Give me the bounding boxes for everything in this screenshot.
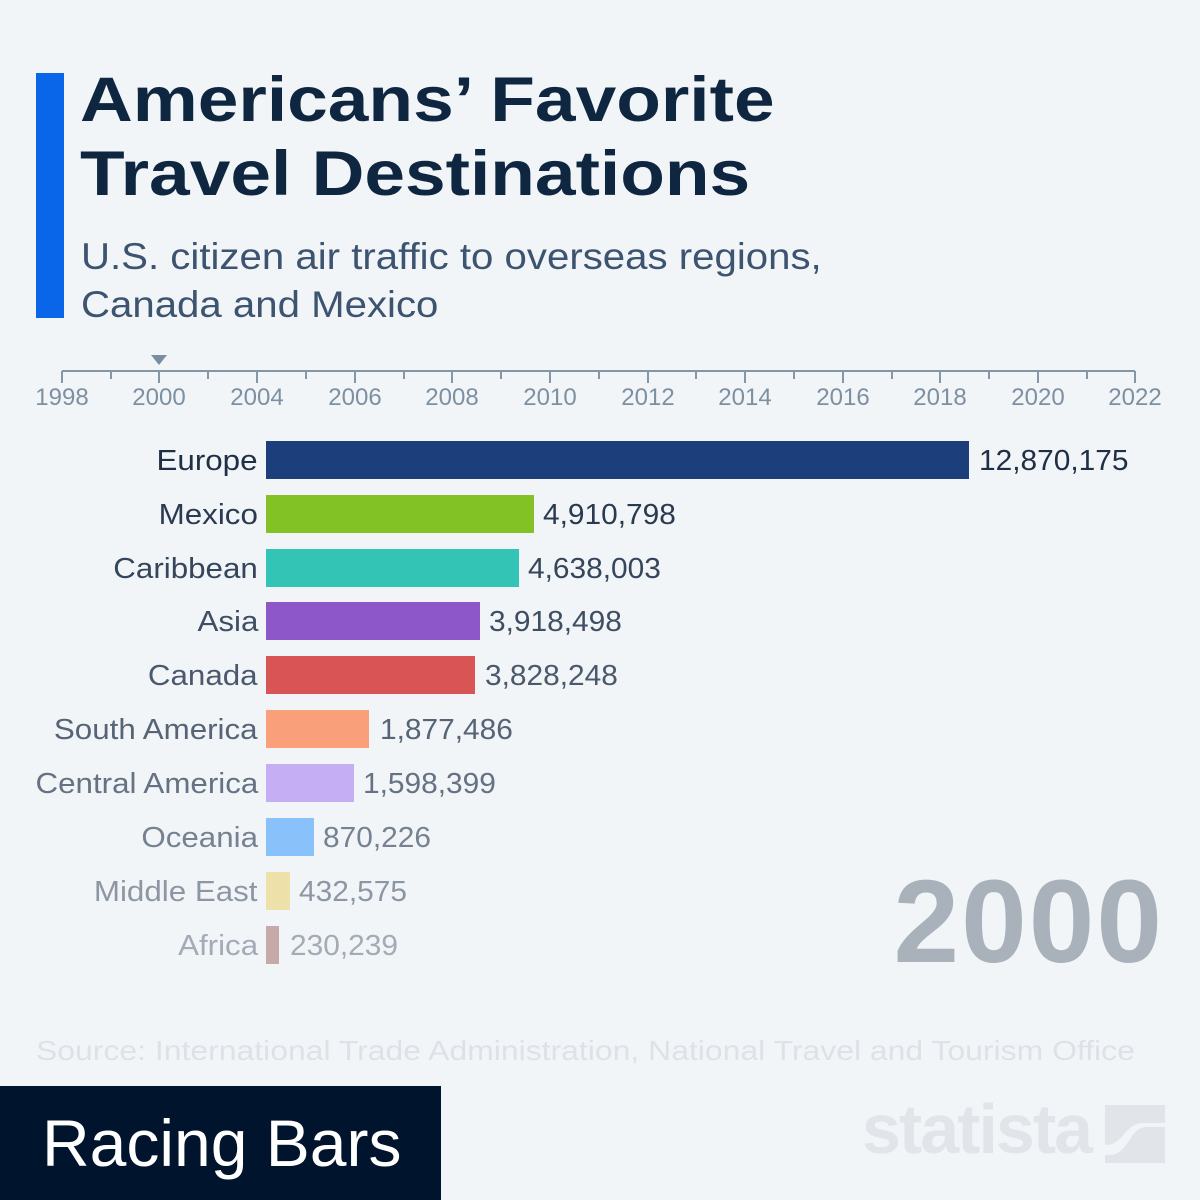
row: Caribbean: Caribbean (113, 553, 258, 585)
timeline: 1998 (35, 384, 89, 411)
row: Europe (157, 441, 1129, 479)
subtitle: U.S. citizen air traffic to overseas regions, (81, 236, 822, 277)
row: Oceania: Oceania (141, 822, 258, 854)
title: Travel Destinations (80, 139, 750, 209)
subtitle (81, 236, 822, 325)
footer label: Racing Bars (42, 1106, 402, 1180)
year label: 2000 (893, 856, 1164, 988)
row: Africa: Africa (178, 930, 258, 962)
row: Canada (148, 656, 618, 694)
source: Source: International Trade Administration, National Travel and Tourism Office (36, 1035, 1135, 1066)
row: Middle East (94, 872, 407, 910)
timeline: 2004 (230, 384, 284, 411)
timeline: 2012 (621, 384, 675, 411)
timeline: 2016 (816, 384, 870, 411)
timeline: 2014 (718, 384, 772, 411)
row: Oceania: 870,226 (323, 822, 431, 854)
row: Asia (197, 602, 622, 640)
row: Central America: 1,598,399 (363, 768, 496, 800)
bar chart (35, 441, 1129, 964)
row: Central America (35, 764, 496, 802)
row: Mexico: 4,910,798 (543, 499, 676, 531)
row: South America (54, 710, 513, 748)
row: Mexico: Mexico (159, 499, 258, 531)
footer label (0, 1086, 441, 1200)
row: Caribbean: 4,638,003 (528, 553, 661, 585)
row: South America: South America (54, 714, 258, 746)
row: Middle East: 432,575 (299, 876, 407, 908)
row: Mexico (159, 495, 676, 533)
row: Africa (178, 926, 398, 964)
row: Europe: Europe (157, 445, 258, 477)
row: Canada: 3,828,248 (485, 660, 618, 692)
title: Americans’ Favorite (80, 65, 775, 135)
timeline: 2000 (132, 384, 186, 411)
row: Asia: Asia (197, 606, 258, 638)
row: Africa: 230,239 (290, 930, 398, 962)
title (80, 65, 775, 209)
timeline: 2008 (425, 384, 479, 411)
row: Middle East: Middle East (94, 876, 258, 908)
timeline: 2022 (1108, 384, 1162, 411)
row: Europe: 12,870,175 (979, 445, 1129, 477)
timeline (35, 355, 1162, 411)
row: South America: 1,877,486 (380, 714, 513, 746)
row: Asia: 3,918,498 (489, 606, 622, 638)
subtitle: Canada and Mexico (81, 284, 438, 325)
timeline: 2010 (523, 384, 577, 411)
logo: statista: statista (862, 1090, 1091, 1168)
timeline: 2006 (328, 384, 382, 411)
accent bar (36, 73, 64, 318)
row: Central America: Central America (35, 768, 258, 800)
row: Canada: Canada (148, 660, 258, 692)
row: Caribbean (113, 549, 661, 587)
timeline: 2020 (1011, 384, 1065, 411)
timeline: 2018 (913, 384, 967, 411)
row: Oceania (141, 818, 431, 856)
